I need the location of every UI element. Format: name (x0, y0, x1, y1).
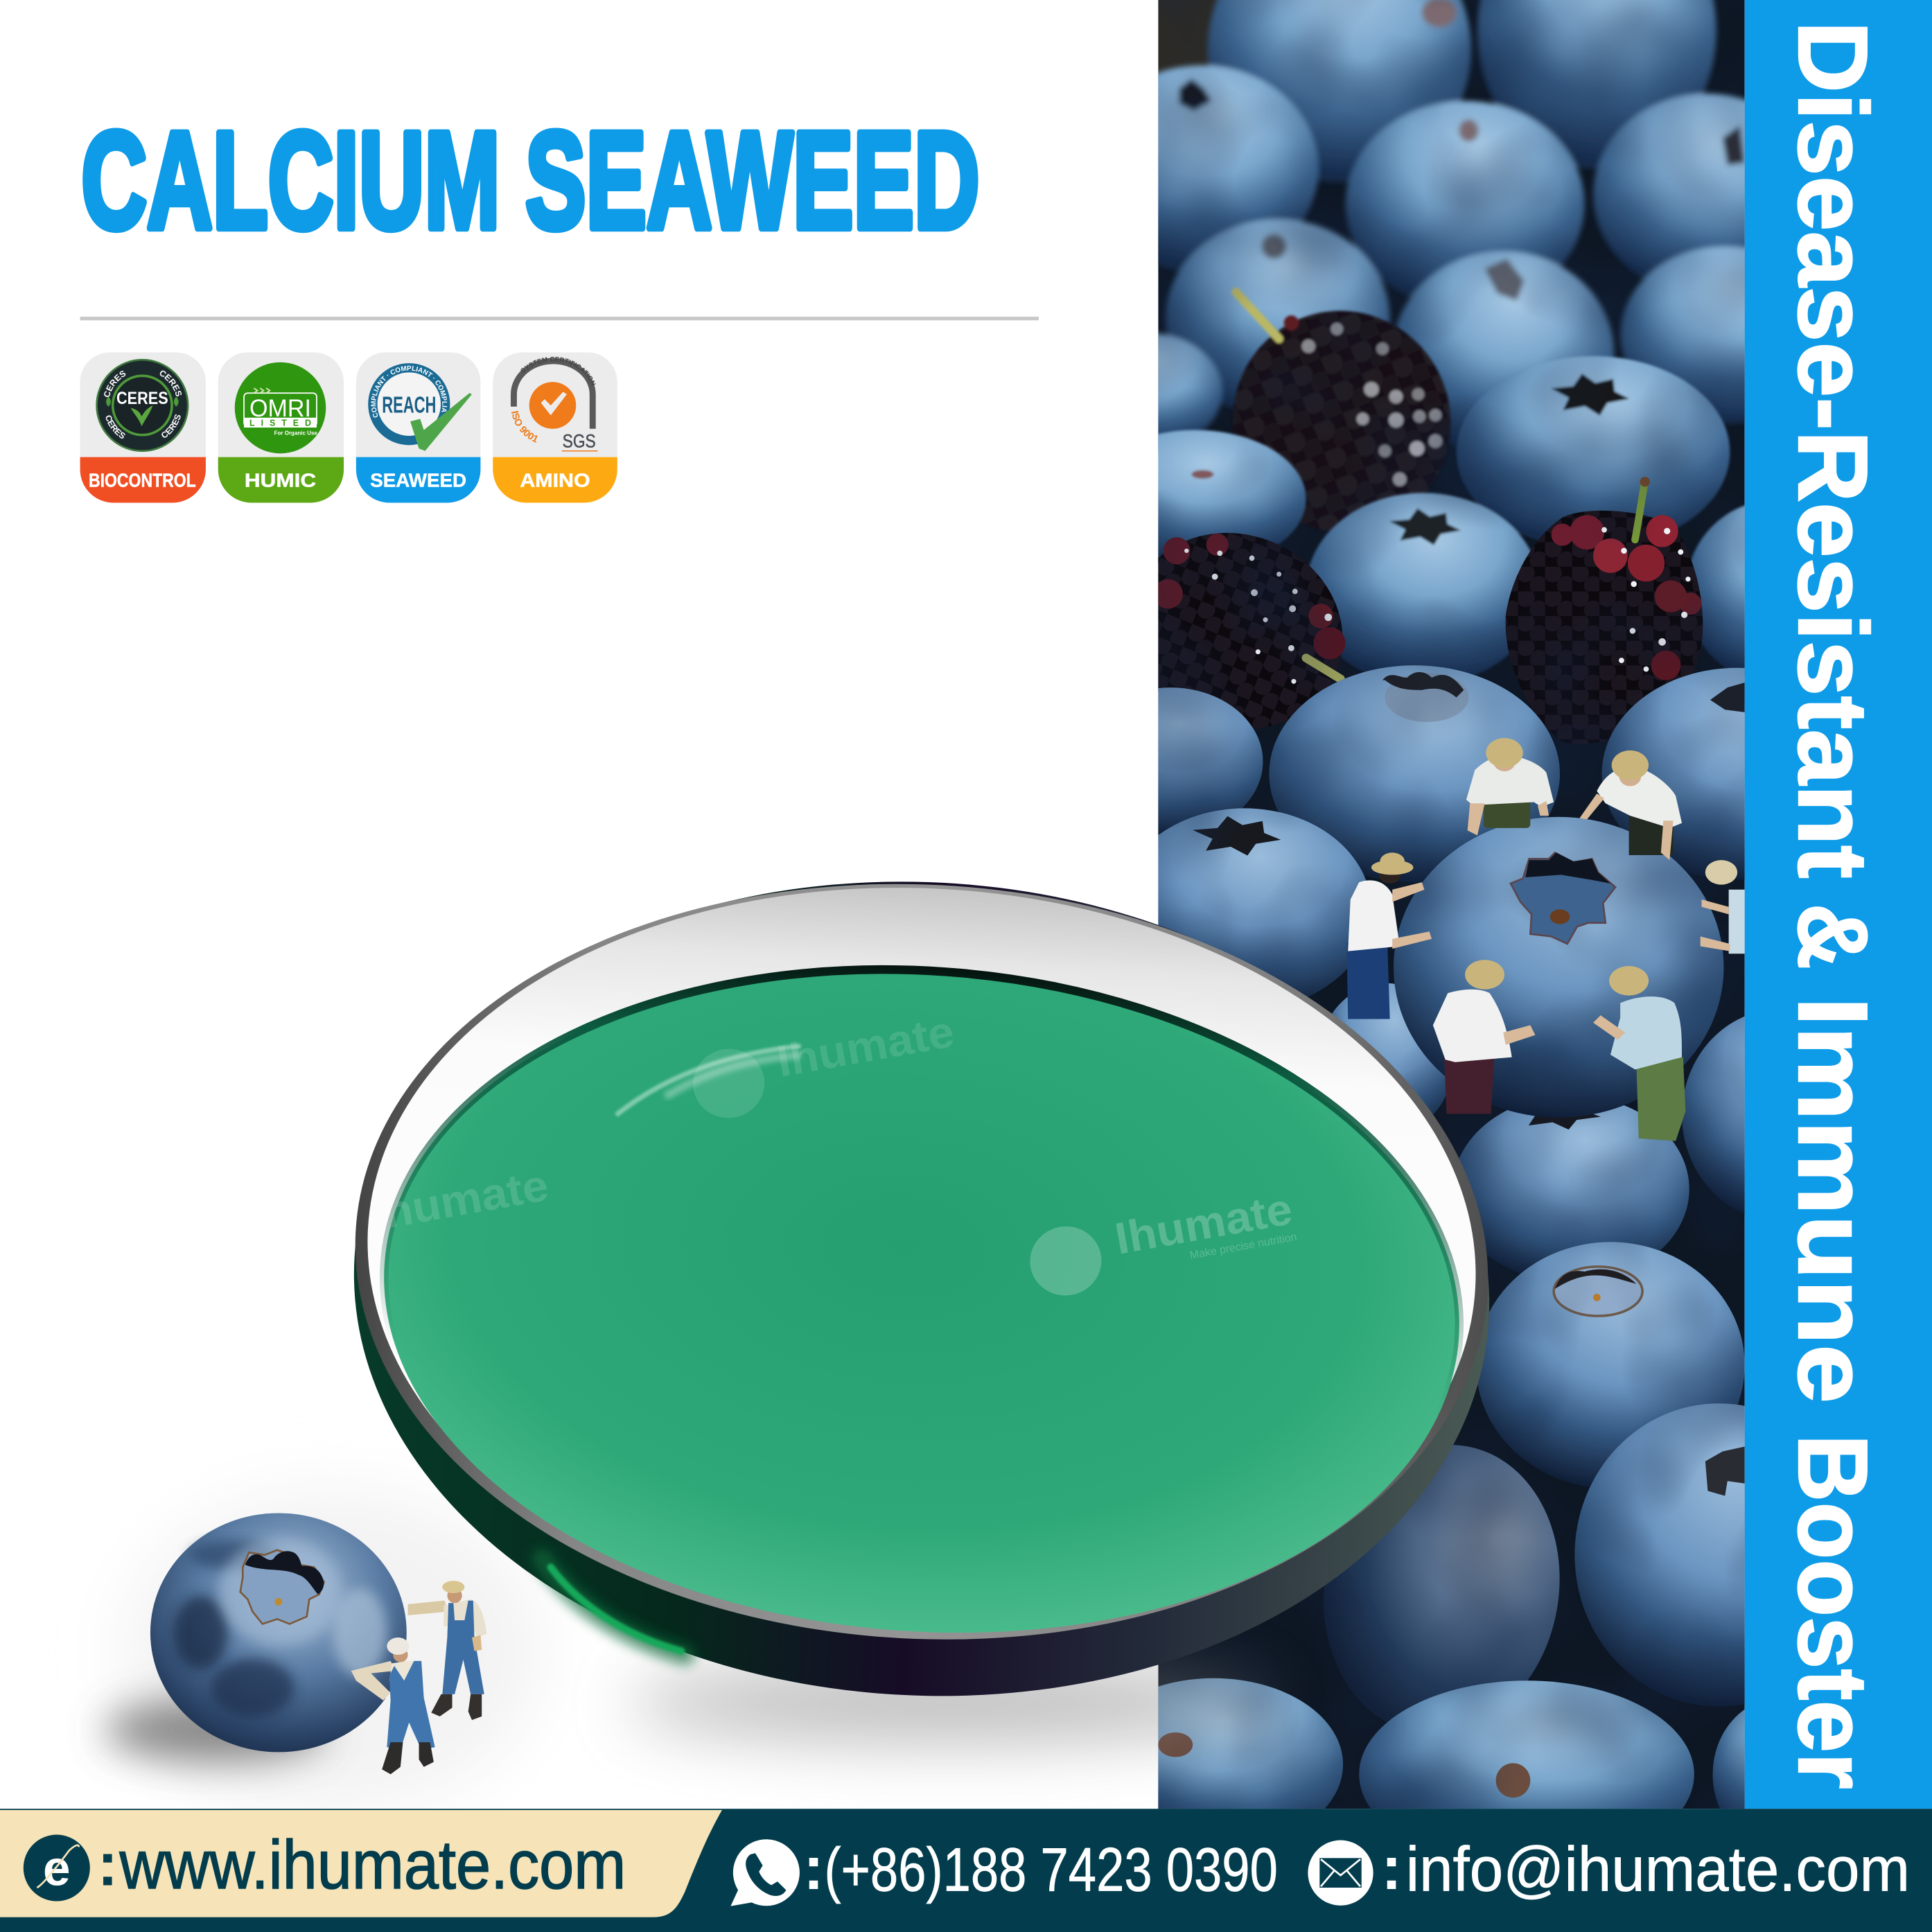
middle rows of blueberries (1158, 355, 1745, 678)
blackberry: right with red drupelets and green stem (1506, 477, 1703, 744)
icon: whatsapp phone (730, 1839, 800, 1906)
petri dish with green liquid (333, 853, 1510, 1725)
icon: blackberry stem left (1306, 658, 1341, 679)
icon: sgs iso 9001 seal: SYSTEM CERTIFICATION (519, 355, 597, 387)
email contact: info@ihumate.com (1406, 1834, 1910, 1904)
glass rim: outer gray band (336, 856, 1507, 1668)
contact footer (0, 1809, 1932, 1932)
icon: browser e (24, 1835, 90, 1902)
icon: sgs iso 9001 seal: ISO 9001 (509, 410, 540, 446)
vertical slogan (1777, 21, 1888, 1789)
title: CALCIUM SEAWEED (81, 104, 980, 258)
surface mottling (1158, 0, 1745, 1809)
watermark: right: Make precise nutrition (1189, 1231, 1298, 1262)
miniature worker: front (351, 1637, 435, 1774)
icon: ceres seal: CERES (116, 389, 168, 408)
badge: seaweed: SEAWEED (370, 469, 466, 491)
certification badges (0, 0, 617, 502)
email contact: : (1381, 1834, 1402, 1902)
glass rim: inner white wall (349, 860, 1495, 1656)
miniature worker: lower left (1433, 960, 1535, 1114)
icon: omri listed seal: OMRI (249, 394, 311, 422)
icon: ceres seal (97, 360, 188, 451)
miniature worker: lower right (1593, 966, 1685, 1141)
miniature worker: standing (408, 1581, 486, 1720)
berry shadow (105, 1698, 326, 1762)
divider line (80, 317, 1039, 320)
badge: biocontrol: BIOCONTROL (89, 469, 196, 491)
small blueberry with two miniature workers (105, 1491, 542, 1811)
white background panel (0, 0, 1158, 1809)
watermark: top (687, 1006, 962, 1123)
miniature worker: top right (1579, 750, 1682, 860)
icon: ceres seal: CERES (104, 371, 126, 397)
vertical slogan: Disease-Resistant (1777, 21, 1888, 879)
blurred back rows of blueberries (1158, 0, 1745, 453)
badge: biocontrol (80, 353, 206, 502)
dish cast shadow (629, 1663, 1269, 1742)
icon: ceres seal: CERES (161, 414, 181, 438)
website tab (0, 1810, 722, 1917)
vertical slogan: Immune (1777, 996, 1888, 1403)
icon: ceres seal: CERES (105, 415, 125, 439)
miniature worker: left (1346, 852, 1432, 1019)
vertical slogan: & (1777, 903, 1888, 969)
vertical slogan: Booster (1777, 1434, 1888, 1789)
icon: sgs iso 9001 seal: SGS (563, 430, 596, 451)
phone contact (730, 1834, 1278, 1906)
watermark: top: Ihumate (773, 1006, 958, 1087)
dish dark base (333, 853, 1510, 1725)
icon: omri listed seal (235, 362, 326, 453)
watermark: right: Ihumate (1112, 1184, 1296, 1264)
miniature worker: right edge (1701, 860, 1746, 954)
blackberry: back, out of focus (1230, 286, 1452, 531)
badge: seaweed (0, 0, 480, 502)
photo panel: blueberries and blackberries with miniature workers (1158, 0, 1745, 1809)
icon: browser e: e (43, 1841, 71, 1896)
blackberry: left (1158, 533, 1346, 728)
side band (1745, 0, 1932, 1809)
icon: envelope (1308, 1841, 1373, 1906)
website tab: : (97, 1829, 118, 1898)
badge: humic: HUMIC (245, 469, 316, 491)
badge: humic (218, 353, 344, 502)
blueberry body (150, 1513, 407, 1752)
badge: amino (493, 353, 617, 502)
large central blueberry with crater (1394, 817, 1724, 1118)
watermark: right (1024, 1184, 1300, 1301)
blossom crater on central blueberry (1511, 852, 1615, 944)
badge: amino: AMINO (520, 469, 590, 491)
icon: reach compliant seal: REACH (382, 392, 436, 418)
icon: ceres seal: CERES (159, 370, 182, 396)
green liquid (362, 934, 1482, 1668)
front rows of blueberries (1078, 665, 1879, 1868)
miniature worker: top left (1466, 738, 1554, 836)
icon: omri listed seal: LISTED (249, 418, 311, 428)
icon: sgs iso 9001 seal (509, 355, 597, 451)
phone contact: (+86)188 7423 0390 (825, 1835, 1278, 1904)
soft ground glow (123, 1491, 542, 1811)
website tab: www.ihumate.com (119, 1827, 626, 1904)
icon: reach compliant seal: COMPLIANT · COMPLIANT · COMPLIANT (371, 366, 448, 417)
bright green reflection (542, 1558, 685, 1655)
icon: omri listed seal: For Organic Use (274, 430, 317, 437)
watermark: left: Ihumate (367, 1160, 552, 1240)
liquid reflections and watermark (367, 1006, 1300, 1301)
phone contact: : (803, 1834, 824, 1902)
